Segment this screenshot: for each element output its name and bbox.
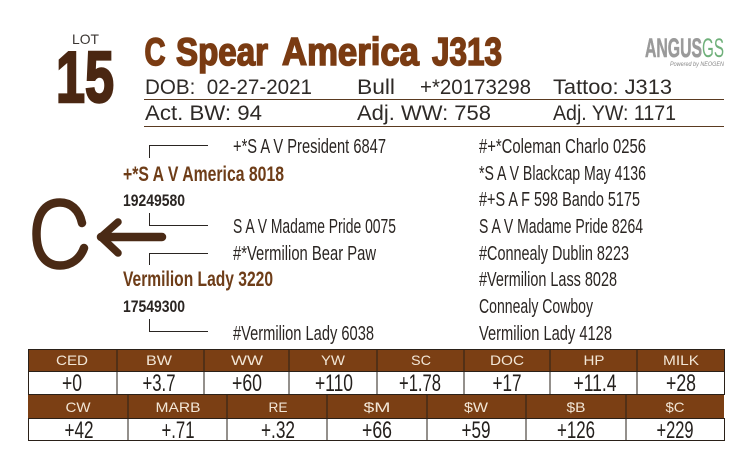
pedigree connector lines xyxy=(150,146,208,332)
pedigree: great-grandparents: S A V Madame Pride 8264 xyxy=(479,216,643,238)
EPD table: row 2: $M xyxy=(364,399,390,415)
title: Spear xyxy=(176,31,268,74)
EPD table: row 2: +.71 xyxy=(162,417,194,444)
EPD table: row 1: +1.78 xyxy=(399,370,441,397)
pedigree: grandparents: #*Vermilion Bear Paw xyxy=(233,243,376,265)
pedigree: grandparents: #Vermilion Lady 6038 xyxy=(233,323,374,345)
animal details: Adj. YW: 1171 xyxy=(553,102,676,125)
EPD table: row 2: $C xyxy=(666,399,684,415)
EPD table: row 2: +42 xyxy=(64,417,94,444)
EPD table: row 1: +0 xyxy=(62,370,82,397)
EPD table: row 1 xyxy=(28,349,725,397)
pedigree: grandparents: +*S A V President 6847 xyxy=(233,136,386,158)
EPD table: row 2: MARB xyxy=(156,399,200,415)
EPD table: row 1: +11.4 xyxy=(574,370,616,397)
lot label: LOT xyxy=(72,31,99,47)
EPD table: row 1: +3.7 xyxy=(142,370,176,397)
EPD table: row 1: DOC xyxy=(490,352,524,368)
pedigree: great-grandparents: #+S A F 598 Bando 5175 xyxy=(479,189,640,211)
EPD table: row 1: SC xyxy=(411,352,431,368)
pedigree: sire and dam xyxy=(123,163,284,316)
EPD table: row 1: +110 xyxy=(315,370,353,397)
animal details xyxy=(144,76,724,127)
EPD table: row 2: $W xyxy=(464,399,489,415)
animal details: DOB: 02-27-2021 xyxy=(145,76,312,99)
animal details: Bull xyxy=(357,76,395,99)
title: America xyxy=(282,31,419,74)
EPD table: row 2: +59 xyxy=(462,417,490,444)
pedigree: great-grandparents xyxy=(479,136,646,345)
EPD table: row 1: CED xyxy=(56,352,88,368)
EPD table: row 1: +17 xyxy=(492,370,522,397)
pedigree: great-grandparents: Vermilion Lady 4128 xyxy=(479,323,612,345)
pedigree: great-grandparents: #Connealy Dublin 8223 xyxy=(479,243,629,265)
EPD table: row 1: YW xyxy=(321,352,346,368)
EPD table: row 1: MILK xyxy=(663,352,700,368)
pedigree: grandparents: S A V Madame Pride 0075 xyxy=(233,216,396,238)
lot number xyxy=(56,31,114,118)
lot value: 15 xyxy=(56,38,114,118)
pedigree: sire and dam: 19249580 xyxy=(123,191,185,210)
pedigree: great-grandparents: Connealy Cowboy xyxy=(479,296,593,318)
animal details: Act. BW: 94 xyxy=(145,102,262,125)
EPD table: row 2: $B xyxy=(566,399,586,415)
logo: Angus GS: Powered by NEOGEN xyxy=(670,61,724,68)
pedigree: great-grandparents: *S A V Blackcap May 4136 xyxy=(479,163,646,185)
EPD table: row 2: +.32 xyxy=(261,417,295,444)
EPD table: row 2: +126 xyxy=(557,417,595,444)
EPD table: row 2 xyxy=(28,395,724,444)
EPD table: row 1: +28 xyxy=(666,370,696,397)
EPD table: row 2: +66 xyxy=(362,417,392,444)
animal details: +*20173298 xyxy=(420,76,531,99)
icon: C brand with arrow xyxy=(36,202,162,266)
EPD table: row 1: WW xyxy=(231,352,264,368)
EPD table: row 1: BW xyxy=(146,352,173,368)
pedigree: great-grandparents: #+*Coleman Charlo 0256 xyxy=(479,136,646,158)
EPD table: row 2: +229 xyxy=(656,417,694,444)
title: C xyxy=(144,31,166,74)
EPD table: row 1: +60 xyxy=(232,370,262,397)
pedigree: great-grandparents: #Vermilion Lass 8028 xyxy=(479,269,617,291)
title: J313 xyxy=(432,31,502,74)
pedigree: sire and dam: 17549300 xyxy=(123,297,185,316)
EPD table: row 1: HP xyxy=(584,352,604,368)
title xyxy=(144,31,502,74)
pedigree: sire and dam: +*S A V America 8018 xyxy=(123,163,284,186)
animal details: Tattoo: J313 xyxy=(553,76,672,99)
pedigree: sire and dam: Vermilion Lady 3220 xyxy=(123,268,273,291)
animal details: Adj. WW: 758 xyxy=(357,102,491,125)
pedigree: grandparents xyxy=(233,136,396,345)
EPD table: row 2: CW xyxy=(66,399,91,415)
EPD table: row 2: RE xyxy=(268,399,288,415)
